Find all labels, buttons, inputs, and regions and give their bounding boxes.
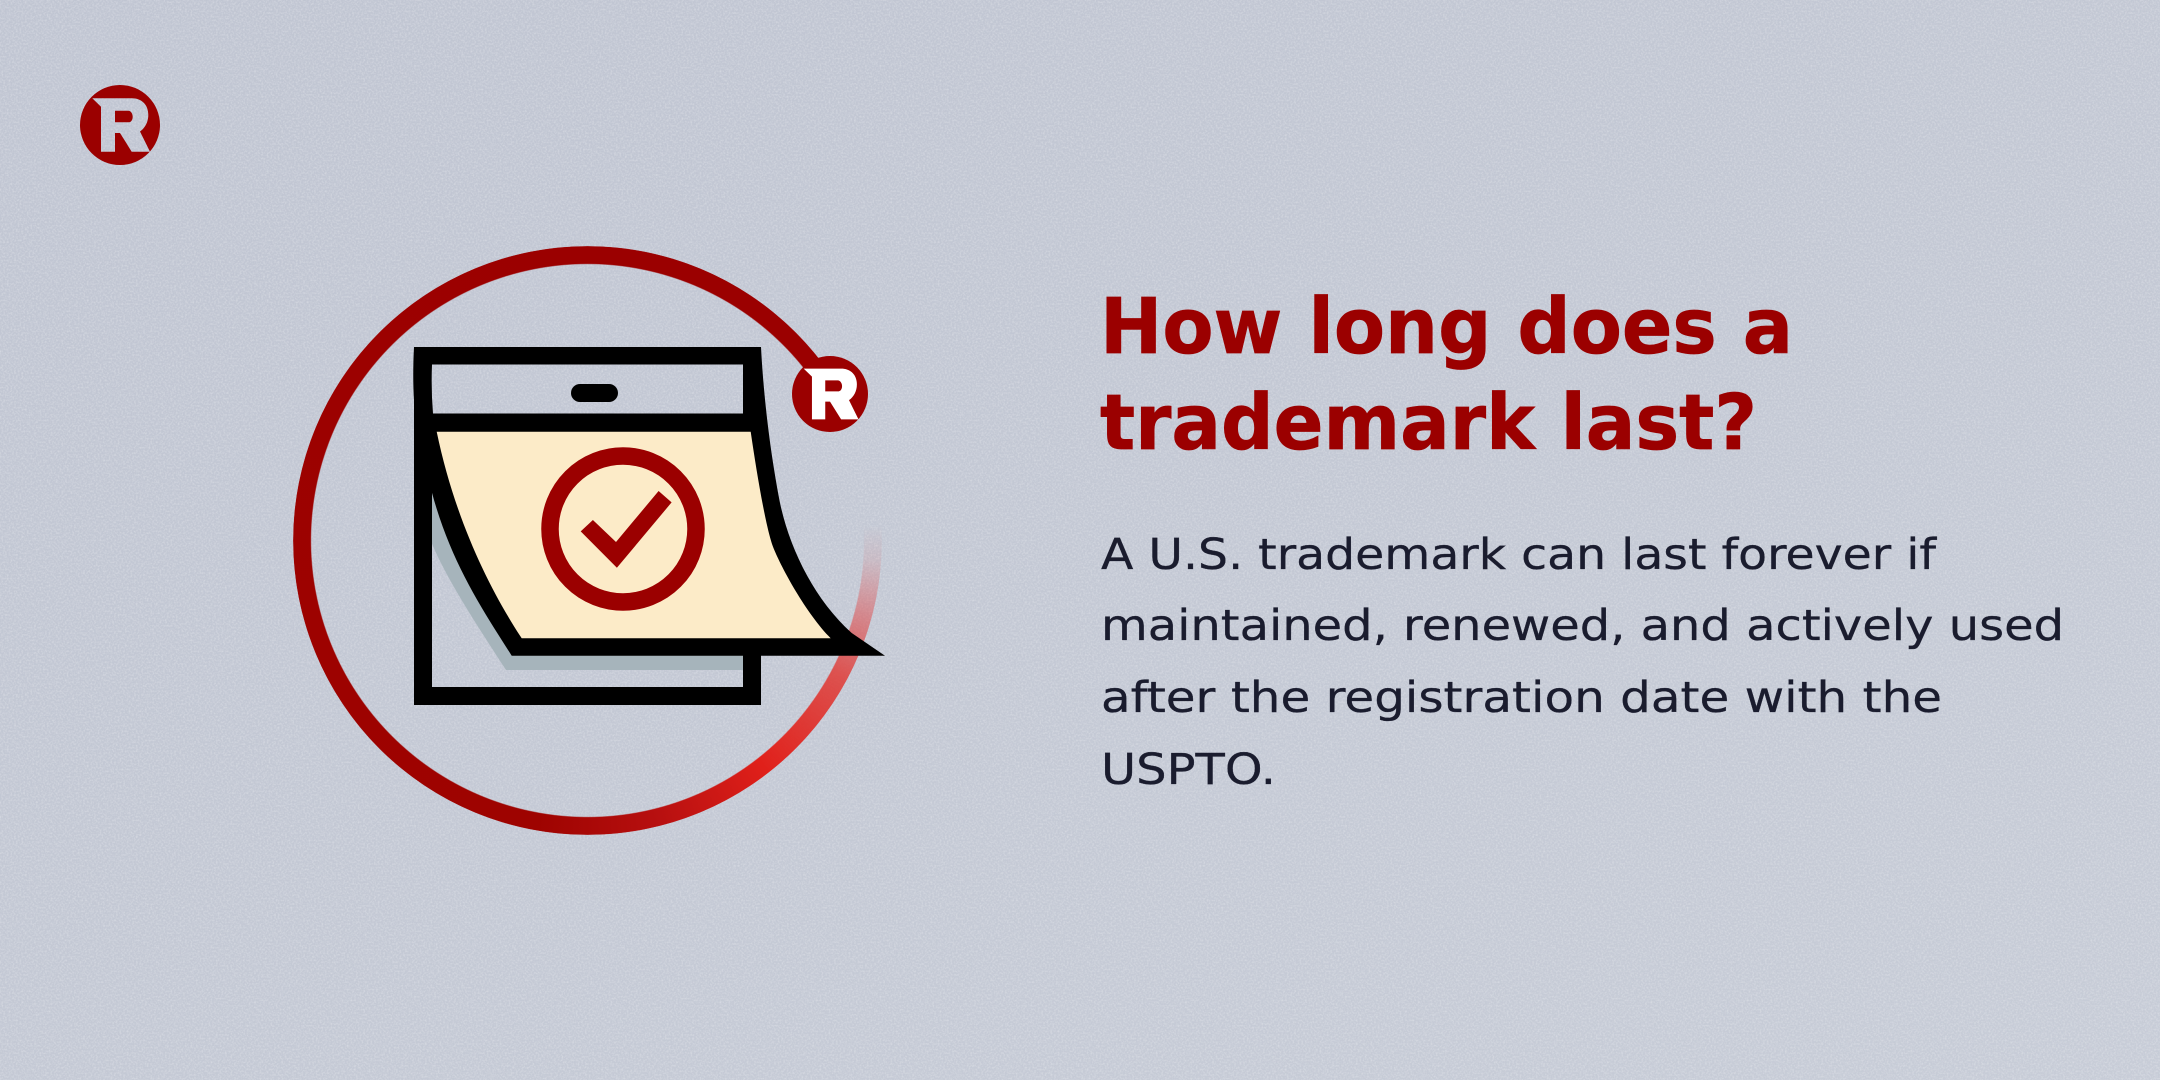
check circle [550, 456, 696, 602]
body paragraph: maintained, renewed, and actively used [1101, 601, 2064, 651]
calendar frame [414, 400, 761, 705]
heading: How long does a [1100, 283, 1793, 372]
body paragraph [1101, 530, 2064, 795]
heading [1100, 283, 1793, 468]
body paragraph: A U.S. trademark can last forever if [1101, 530, 1937, 580]
body paragraph: USPTO. [1101, 745, 1276, 795]
calendar page shadow [432, 491, 743, 670]
calendar binding slot [571, 384, 618, 402]
curled page cream fill [437, 432, 831, 638]
body paragraph: after the registration date with the [1101, 673, 1942, 723]
heading: trademark last? [1100, 379, 1757, 468]
circular progress ring [293, 246, 882, 834]
check mark [581, 491, 672, 568]
curled calendar page outline [413, 347, 885, 656]
